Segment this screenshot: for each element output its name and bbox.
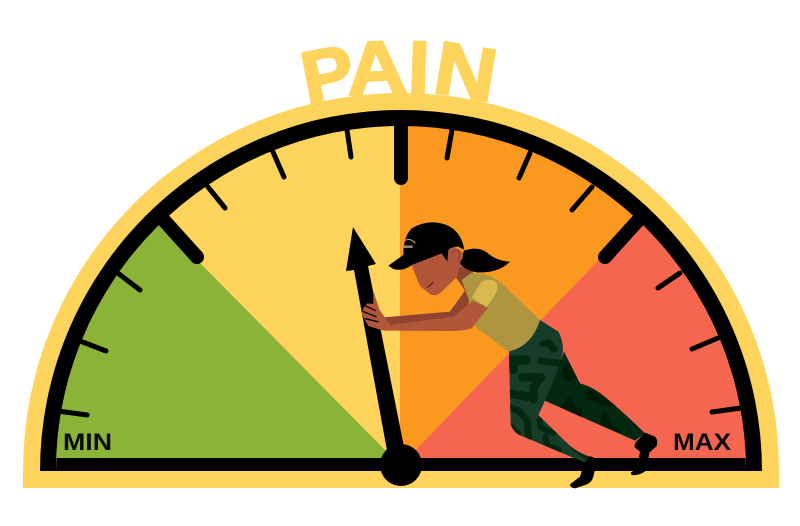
- gauge outer yellow rim: [23, 93, 779, 488]
- back leg camo: [562, 366, 620, 431]
- zone: red: [416, 225, 746, 458]
- gauge colour zones: [56, 126, 746, 470]
- major tick marks: [160, 127, 642, 257]
- minor tick marks: [58, 130, 741, 415]
- title: PAIN: A: [344, 24, 408, 111]
- title: PAIN: I: [406, 26, 431, 110]
- shoe: back foot: [631, 433, 657, 475]
- legs: [508, 320, 657, 488]
- title: PAIN: P: [294, 30, 361, 121]
- zone: yellow: [56, 126, 400, 470]
- woman pushing the needle, upper body: [362, 222, 540, 352]
- label: MIN: MIN: [63, 429, 112, 456]
- title: PAIN: N: [428, 26, 503, 119]
- neck: [456, 265, 473, 293]
- shirt: [462, 273, 540, 352]
- face: [412, 247, 461, 295]
- label: MAX: MAX: [673, 429, 731, 456]
- cap: [388, 222, 464, 270]
- zone: orange: [400, 126, 746, 470]
- needle hub: [380, 444, 422, 486]
- back leg: [543, 352, 645, 441]
- inner ear: [452, 251, 459, 262]
- title: PAIN: [294, 24, 503, 121]
- back arm: [384, 291, 471, 326]
- hand with fingers: [362, 291, 390, 331]
- zone: green: [56, 225, 386, 458]
- needle arrow: [346, 227, 405, 456]
- ponytail: [459, 249, 510, 272]
- shoe: front foot: [570, 456, 597, 488]
- front arm: [383, 301, 488, 331]
- ear: [448, 248, 463, 263]
- mouth: [427, 282, 433, 288]
- front leg camo: [508, 343, 586, 457]
- front leg: [509, 320, 590, 463]
- cap badge: [404, 239, 415, 248]
- gauge black band: [40, 110, 762, 471]
- sleeve: [472, 280, 497, 307]
